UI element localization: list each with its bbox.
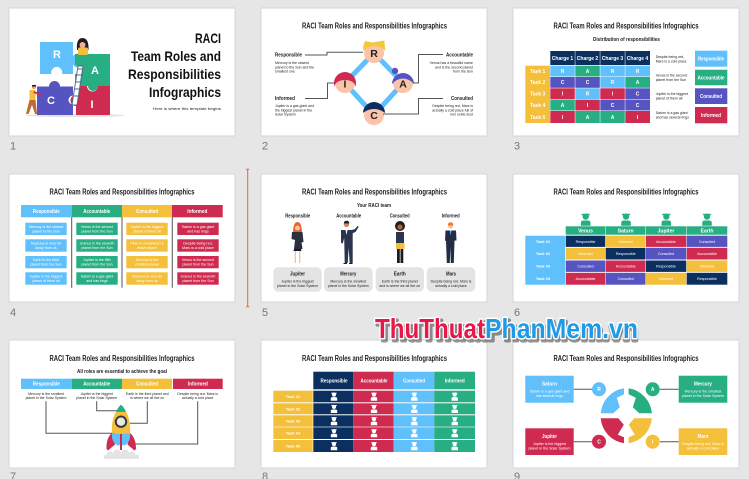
box: Jupiter: Jupiter is the biggest bbox=[533, 442, 566, 446]
subtitle: Distribution of responsibilities bbox=[593, 37, 660, 43]
table: A bbox=[586, 69, 590, 75]
role descriptions: is where we all live on bbox=[130, 396, 164, 400]
column: Accountable: Jupiter is the fifth bbox=[83, 258, 111, 262]
column: Accountable: Uranus is the seventh bbox=[80, 241, 114, 245]
column: Consulted: smallest planet bbox=[135, 263, 159, 267]
text: Consulted bbox=[432, 96, 473, 117]
title bbox=[128, 30, 221, 100]
column: Responsible: Earth is the third bbox=[33, 258, 59, 262]
slide 9: circular quadrants bbox=[513, 340, 739, 479]
role descriptions: Jupiter is the biggest bbox=[81, 392, 113, 396]
table: R bbox=[561, 69, 565, 75]
table: Task 01 bbox=[286, 394, 301, 399]
box: Mars: Despite being red, Mars is bbox=[682, 442, 724, 446]
legend descriptions: and has several rings bbox=[656, 115, 689, 119]
column: Consulted: planet of them all bbox=[133, 229, 161, 233]
box: Jupiter: planet in the Solar System bbox=[529, 446, 570, 450]
subtitle: Your RACI team bbox=[357, 203, 391, 209]
badge: I: I bbox=[652, 440, 654, 446]
icon: RACI puzzle: R bbox=[53, 49, 61, 61]
role labels bbox=[285, 214, 460, 220]
person: woman with red hair bbox=[292, 222, 304, 263]
slide number: 3 bbox=[514, 140, 520, 152]
role labels: Accountable bbox=[336, 214, 361, 220]
table: R bbox=[611, 69, 615, 75]
role headers: Informed bbox=[188, 382, 208, 388]
badge: C bbox=[592, 435, 606, 449]
text: Responsible: Mercury is the closest bbox=[275, 61, 309, 65]
column: Accountable: planet from the Sun bbox=[81, 263, 113, 267]
heading: RACI Team Roles and Responsibilities Infographics bbox=[302, 354, 447, 363]
card: Jupiter bbox=[273, 267, 322, 292]
matrix table bbox=[525, 226, 727, 285]
column: Consulted: Jupiter is the biggest bbox=[131, 225, 163, 229]
text: Consulted: Despite being red, Mars is bbox=[432, 104, 473, 108]
heading: RACI Team Roles and Responsibilities Infographics bbox=[554, 354, 699, 363]
avatar: R bbox=[363, 40, 385, 63]
box: Mars: Mars bbox=[698, 434, 709, 440]
role labels: Responsible bbox=[285, 214, 310, 220]
role descriptions: Mercury is the smallest bbox=[28, 392, 64, 396]
circle chart bbox=[601, 388, 652, 443]
column: Informed: Venus is the second bbox=[182, 258, 214, 262]
column: Consulted: dwarf planet bbox=[137, 246, 157, 250]
table: Informed bbox=[445, 378, 465, 384]
table: C bbox=[636, 103, 640, 109]
column dividers bbox=[72, 217, 172, 288]
icon: RACI puzzle: I bbox=[90, 99, 94, 111]
text: Informed: the biggest planet in the bbox=[275, 108, 312, 112]
column: Responsible: Neptune is very far bbox=[31, 241, 62, 245]
avatar: A: A bbox=[399, 78, 407, 90]
column: Consulted bbox=[126, 223, 168, 285]
column: Accountable: and has rings bbox=[86, 279, 108, 283]
legend descriptions bbox=[656, 55, 689, 119]
box: Mars bbox=[679, 428, 727, 455]
table: C bbox=[561, 80, 565, 86]
table: I bbox=[587, 103, 589, 109]
table: Charge 1 bbox=[552, 56, 573, 62]
box: Saturn bbox=[525, 376, 574, 403]
table: C bbox=[611, 103, 615, 109]
role descriptions: Earth is the third planet and bbox=[126, 392, 169, 396]
table: Task 2 bbox=[530, 80, 546, 86]
avatar: C bbox=[363, 102, 385, 125]
card: Mercury: Mercury bbox=[340, 272, 356, 278]
badge: I bbox=[646, 435, 660, 449]
card: Jupiter: Jupiter is the biggest bbox=[281, 280, 314, 284]
table: Charge 4 bbox=[627, 56, 648, 62]
matrix table: Consulted bbox=[699, 240, 715, 244]
table: I bbox=[612, 92, 614, 98]
legend boxes: Informed bbox=[701, 113, 721, 119]
badge: A: A bbox=[651, 387, 655, 393]
icon: ladder bbox=[72, 66, 83, 105]
legend descriptions: planet from the Sun bbox=[656, 78, 686, 82]
role labels: Consulted bbox=[390, 214, 410, 220]
role headers: Consulted bbox=[136, 382, 158, 388]
box: Saturn: Saturn bbox=[542, 382, 557, 388]
slide 1: cover bbox=[9, 8, 235, 152]
legend descriptions: Saturn is a gas giant bbox=[656, 111, 688, 115]
column: Informed: planet from the Sun bbox=[182, 279, 214, 283]
icon: rocket bbox=[104, 405, 139, 459]
title: Responsibilities bbox=[128, 66, 221, 82]
slide 7: rocket bbox=[9, 340, 235, 479]
subtitle: All roles are essential to achieve the goal bbox=[77, 369, 167, 375]
insertion marker bbox=[246, 169, 249, 307]
matrix table: Task 01 bbox=[536, 239, 551, 244]
badge: R bbox=[592, 382, 606, 396]
card: Mars: Mars bbox=[446, 272, 456, 278]
matrix table: Consulted bbox=[577, 264, 594, 268]
badge: R: R bbox=[597, 387, 601, 393]
table: A bbox=[611, 115, 615, 121]
matrix table: Task 03 bbox=[536, 264, 551, 268]
avatar: I bbox=[334, 72, 356, 93]
slide number: 1 bbox=[10, 140, 16, 152]
matrix table: Consulted bbox=[618, 277, 634, 281]
column: Consulted: Mercury is the bbox=[136, 258, 158, 262]
icon: RACI puzzle bbox=[37, 42, 110, 115]
legend boxes: Accountable bbox=[698, 75, 725, 81]
legend boxes: Consulted bbox=[700, 94, 722, 100]
box: Mercury: Mercury bbox=[694, 382, 712, 388]
person: man in suit waving bbox=[341, 221, 359, 264]
text: Consulted: actually a cold place full of bbox=[432, 108, 473, 112]
table: R bbox=[586, 92, 590, 98]
matrix table: Task 02 bbox=[536, 251, 551, 256]
table: Task 1 bbox=[530, 69, 546, 75]
table: C bbox=[636, 92, 640, 98]
icons: white avatars bbox=[331, 393, 458, 450]
column headers: Consulted bbox=[136, 209, 158, 215]
column: Accountable: Venus is the second bbox=[81, 225, 113, 229]
card: Earth bbox=[376, 267, 424, 292]
watermark: ThuThuatPhanMem.vn bbox=[377, 316, 638, 346]
icon: man pushing bbox=[26, 85, 44, 114]
legend descriptions: Despite being red, bbox=[656, 55, 684, 59]
column: Consulted: away from us bbox=[136, 279, 158, 283]
matrix table: Task 04 bbox=[536, 276, 551, 281]
slide 5: team people bbox=[261, 174, 487, 319]
card: Mars: Despite being red, Mars is bbox=[431, 280, 472, 284]
column: Responsible bbox=[25, 223, 67, 285]
icons: green avatars bbox=[581, 214, 712, 226]
column headers: Accountable bbox=[83, 209, 110, 215]
text: Responsible: Responsible bbox=[275, 52, 302, 58]
table: C bbox=[586, 80, 590, 86]
card: Jupiter: planet in the Solar System bbox=[277, 284, 318, 288]
matrix table: Venus bbox=[578, 228, 593, 234]
card: Earth: and is where we all live on bbox=[379, 284, 420, 288]
text: Accountable: Accountable bbox=[446, 52, 473, 58]
table: A bbox=[636, 80, 640, 86]
icon: woman at the top bbox=[77, 38, 89, 55]
text: Responsible bbox=[275, 52, 314, 74]
slide number: 4 bbox=[10, 307, 16, 319]
table: Responsible bbox=[320, 378, 348, 384]
legend descriptions: Mars is a cold place bbox=[656, 59, 687, 63]
matrix table: Accountable bbox=[576, 277, 595, 281]
table: Task 4 bbox=[530, 103, 546, 109]
legend descriptions: Jupiter is the biggest bbox=[656, 92, 688, 96]
role labels: Informed bbox=[442, 214, 460, 220]
table: A bbox=[561, 103, 565, 109]
icon: ground shadow bbox=[25, 114, 125, 117]
text: Responsible: smallest one bbox=[275, 70, 295, 74]
box: Jupiter bbox=[525, 428, 574, 455]
card: Mars: actually a cold place bbox=[435, 284, 467, 288]
column: Responsible: planet of them all bbox=[32, 279, 60, 283]
connectors bbox=[305, 52, 443, 114]
table: I bbox=[637, 115, 639, 121]
card: Mercury: planet in the Solar System bbox=[328, 284, 369, 288]
slide 3: distribution table bbox=[513, 8, 739, 152]
text: Accountable: and is the second planet bbox=[435, 65, 473, 69]
slide number: 5 bbox=[262, 307, 268, 319]
table: Charge 2 bbox=[577, 56, 598, 62]
badge: A bbox=[646, 382, 660, 396]
heading: RACI Team Roles and Responsibilities Infographics bbox=[554, 22, 699, 30]
heading: RACI Team Roles and Responsibilities Infographics bbox=[302, 22, 447, 30]
column: Accountable: planet from the Sun bbox=[81, 229, 113, 233]
title: Team Roles and bbox=[131, 48, 221, 64]
matrix table: Responsible bbox=[656, 264, 676, 268]
matrix table: Consulted bbox=[658, 252, 674, 256]
role headers bbox=[21, 379, 223, 389]
role descriptions: planet in the Solar System bbox=[76, 396, 117, 400]
column: Responsible: away from us bbox=[35, 246, 57, 250]
avatar: C: C bbox=[370, 110, 378, 122]
column: Responsible: Mercury is the closest bbox=[29, 225, 63, 229]
column headers bbox=[21, 205, 223, 217]
table: A bbox=[586, 115, 590, 121]
legend boxes bbox=[695, 51, 727, 123]
matrix table: Informed bbox=[619, 240, 633, 244]
slide number: 2 bbox=[262, 140, 268, 152]
slide 4: four columns bbox=[9, 174, 235, 319]
title: Infographics bbox=[149, 84, 221, 100]
legend descriptions: planet of them all bbox=[656, 96, 683, 100]
watermark: ThuThuat bbox=[375, 313, 485, 344]
box: Mars: actually a cold place bbox=[687, 446, 719, 450]
column: Accountable: planet from the Sun bbox=[81, 246, 113, 250]
text: Informed: Jupiter is a gas giant and bbox=[275, 104, 314, 108]
badge: C: C bbox=[597, 440, 601, 446]
matrix table: Accountable bbox=[616, 264, 636, 268]
connectors bbox=[46, 401, 198, 444]
column: Consulted: Pluto is considered a bbox=[130, 241, 164, 245]
box: Mercury bbox=[679, 376, 727, 403]
matrix table: Accountable bbox=[656, 240, 676, 244]
text: Responsible: planet to the Sun and the bbox=[275, 65, 314, 69]
heading: RACI Team Roles and Responsibilities Infographics bbox=[50, 354, 195, 363]
connectors bbox=[574, 389, 679, 442]
legend boxes: Responsible bbox=[698, 56, 724, 62]
role descriptions bbox=[26, 392, 218, 400]
heading: RACI Team Roles and Responsibilities Infographics bbox=[302, 188, 447, 196]
avatar: A bbox=[392, 68, 414, 93]
avatar: R: R bbox=[370, 48, 378, 60]
slide 8: task icons table bbox=[261, 340, 487, 479]
person: woman with yellow tablet bbox=[395, 221, 405, 263]
matrix table: Earth bbox=[701, 228, 713, 234]
matrix table: Jupiter bbox=[658, 228, 674, 234]
text: Accountable: Venus has a beautiful name bbox=[430, 61, 473, 65]
card: Mercury bbox=[324, 267, 373, 292]
icon: RACI puzzle: A bbox=[91, 65, 99, 77]
column: Informed: Mars is a cold place bbox=[182, 246, 214, 250]
table: Task 05 bbox=[286, 444, 301, 448]
matrix table: Responsible bbox=[576, 240, 595, 244]
box: Mercury: Mercury is the smallest bbox=[685, 390, 721, 394]
column: Informed: Despite being red, bbox=[183, 241, 213, 245]
column: Responsible: Jupiter is the biggest bbox=[30, 274, 62, 278]
column: Responsible: planet from the Sun bbox=[30, 263, 62, 267]
table bbox=[525, 51, 650, 123]
text: Consulted: iron oxide dust bbox=[450, 113, 473, 117]
card: Jupiter: Jupiter bbox=[290, 272, 305, 278]
column: Informed: Uranus is the seventh bbox=[181, 274, 215, 278]
column: Consulted: Neptune is very far bbox=[132, 274, 163, 278]
box: Mercury: planet in the Solar System bbox=[682, 394, 724, 398]
box: Saturn: Saturn is a gas giant and bbox=[530, 390, 569, 394]
role descriptions: actually a cold place bbox=[182, 396, 214, 400]
text: Accountable: from the Sun bbox=[453, 70, 473, 74]
table: I bbox=[562, 92, 564, 98]
table: Task 03 bbox=[286, 418, 301, 424]
column: Informed: and has rings bbox=[187, 229, 209, 233]
heading: RACI Team Roles and Responsibilities Infographics bbox=[554, 188, 699, 196]
table: Charge 3 bbox=[602, 56, 623, 62]
role descriptions: Despite being red, Mars is bbox=[177, 392, 218, 396]
card: Mercury: Mercury is the smallest bbox=[330, 280, 366, 284]
table: Task 5 bbox=[530, 115, 546, 121]
column: Informed: Saturn is a gas giant bbox=[182, 225, 214, 229]
table: Task 02 bbox=[286, 406, 301, 412]
text: Informed: Informed bbox=[275, 96, 295, 102]
subtitle: Here is where this template begins bbox=[153, 107, 221, 111]
card: Earth: Earth is the third planet bbox=[382, 280, 418, 284]
column: Accountable bbox=[76, 223, 118, 285]
table: Task 04 bbox=[286, 431, 301, 436]
column: Responsible: planet to the Sun bbox=[32, 229, 60, 233]
matrix table: Informed bbox=[659, 277, 673, 281]
role descriptions: planet in the Solar System bbox=[26, 396, 67, 400]
title: RACI bbox=[195, 30, 221, 46]
matrix table: Responsible bbox=[616, 252, 636, 256]
card: Earth: Earth bbox=[394, 272, 406, 278]
role headers: Accountable bbox=[83, 382, 110, 388]
table: I bbox=[562, 115, 564, 121]
text: Accountable bbox=[430, 52, 473, 74]
text: Informed: Solar System bbox=[275, 113, 296, 117]
table: Task 3 bbox=[530, 92, 546, 98]
slide 2: diamond roles bbox=[261, 8, 487, 152]
matrix table: Responsible bbox=[697, 277, 717, 281]
table bbox=[273, 372, 475, 452]
column headers: Informed bbox=[187, 209, 207, 215]
column headers: Responsible bbox=[33, 209, 60, 215]
diamond links bbox=[345, 53, 403, 115]
matrix table: Saturn bbox=[618, 228, 634, 234]
person: man with orange hair bbox=[445, 222, 456, 263]
icon: RACI puzzle: C bbox=[47, 95, 55, 107]
text: Informed bbox=[275, 96, 314, 117]
slide 6: task matrix bbox=[513, 174, 739, 319]
text: Consulted: Consulted bbox=[451, 96, 473, 102]
legend descriptions: Venus is the second bbox=[656, 74, 687, 78]
column: Informed: planet from the Sun bbox=[182, 263, 214, 267]
box: Jupiter: Jupiter bbox=[542, 434, 557, 440]
table: R bbox=[636, 69, 640, 75]
slide number: 6 bbox=[514, 307, 520, 319]
card: Mars bbox=[427, 267, 475, 292]
table: Accountable bbox=[360, 378, 388, 384]
matrix table: Informed bbox=[578, 252, 593, 256]
box: Saturn: has several rings bbox=[536, 394, 563, 398]
matrix table: Accountable bbox=[697, 252, 717, 256]
table: R bbox=[611, 80, 615, 86]
column: Accountable: Saturn is a gas giant bbox=[81, 274, 113, 278]
avatar: I: I bbox=[344, 78, 347, 90]
heading: RACI Team Roles and Responsibilities Infographics bbox=[50, 188, 195, 196]
column: Informed bbox=[177, 223, 219, 285]
watermark: PhanMem.vn bbox=[485, 313, 638, 344]
role headers: Responsible bbox=[33, 382, 60, 388]
table: Consulted bbox=[403, 378, 425, 384]
matrix table: Informed bbox=[700, 264, 714, 268]
